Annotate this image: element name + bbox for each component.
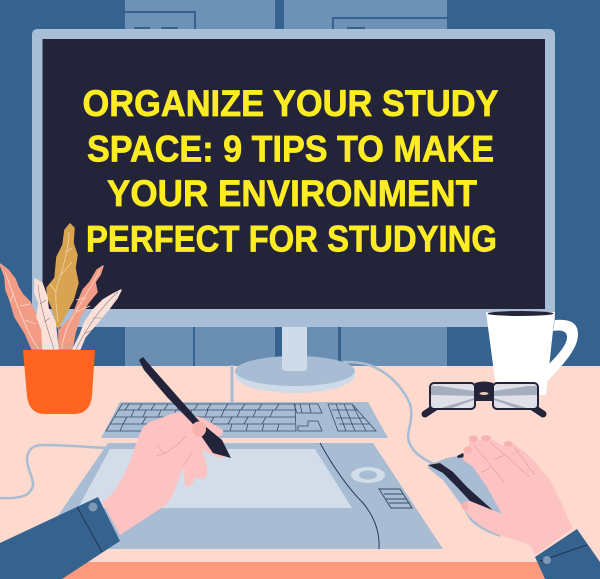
monitor stand (235, 327, 355, 393)
plant (0, 224, 121, 349)
coffee mug (486, 311, 578, 395)
monitor cables (0, 362, 434, 498)
right sleeve (535, 529, 600, 579)
title: SPACE: 9 TIPS TO MAKE (87, 128, 494, 170)
title: ORGANIZE YOUR STUDY (82, 83, 499, 124)
tablet buttons (379, 489, 412, 508)
left hand with pen (102, 357, 231, 535)
left hand (102, 412, 225, 535)
left salmon leaf (0, 264, 44, 349)
mouse (428, 453, 502, 537)
glasses (425, 382, 543, 414)
pen (139, 357, 231, 458)
drawing tablet (35, 443, 443, 549)
right salmon leaf (59, 266, 103, 349)
keyboard (101, 402, 388, 438)
thumb (160, 422, 206, 452)
white left leaf (35, 279, 58, 349)
plant pot (23, 350, 95, 414)
left sleeve (0, 497, 120, 579)
monitor (32, 29, 555, 327)
background wall (0, 0, 600, 370)
gold leaf (47, 224, 78, 328)
right hand (462, 435, 573, 555)
desk (0, 366, 600, 579)
white right leaf (73, 290, 121, 349)
title (82, 83, 499, 260)
title: YOUR ENVIRONMENT (107, 173, 477, 214)
tablet dial (351, 467, 385, 483)
title: PERFECT FOR STUDYING (86, 218, 497, 260)
